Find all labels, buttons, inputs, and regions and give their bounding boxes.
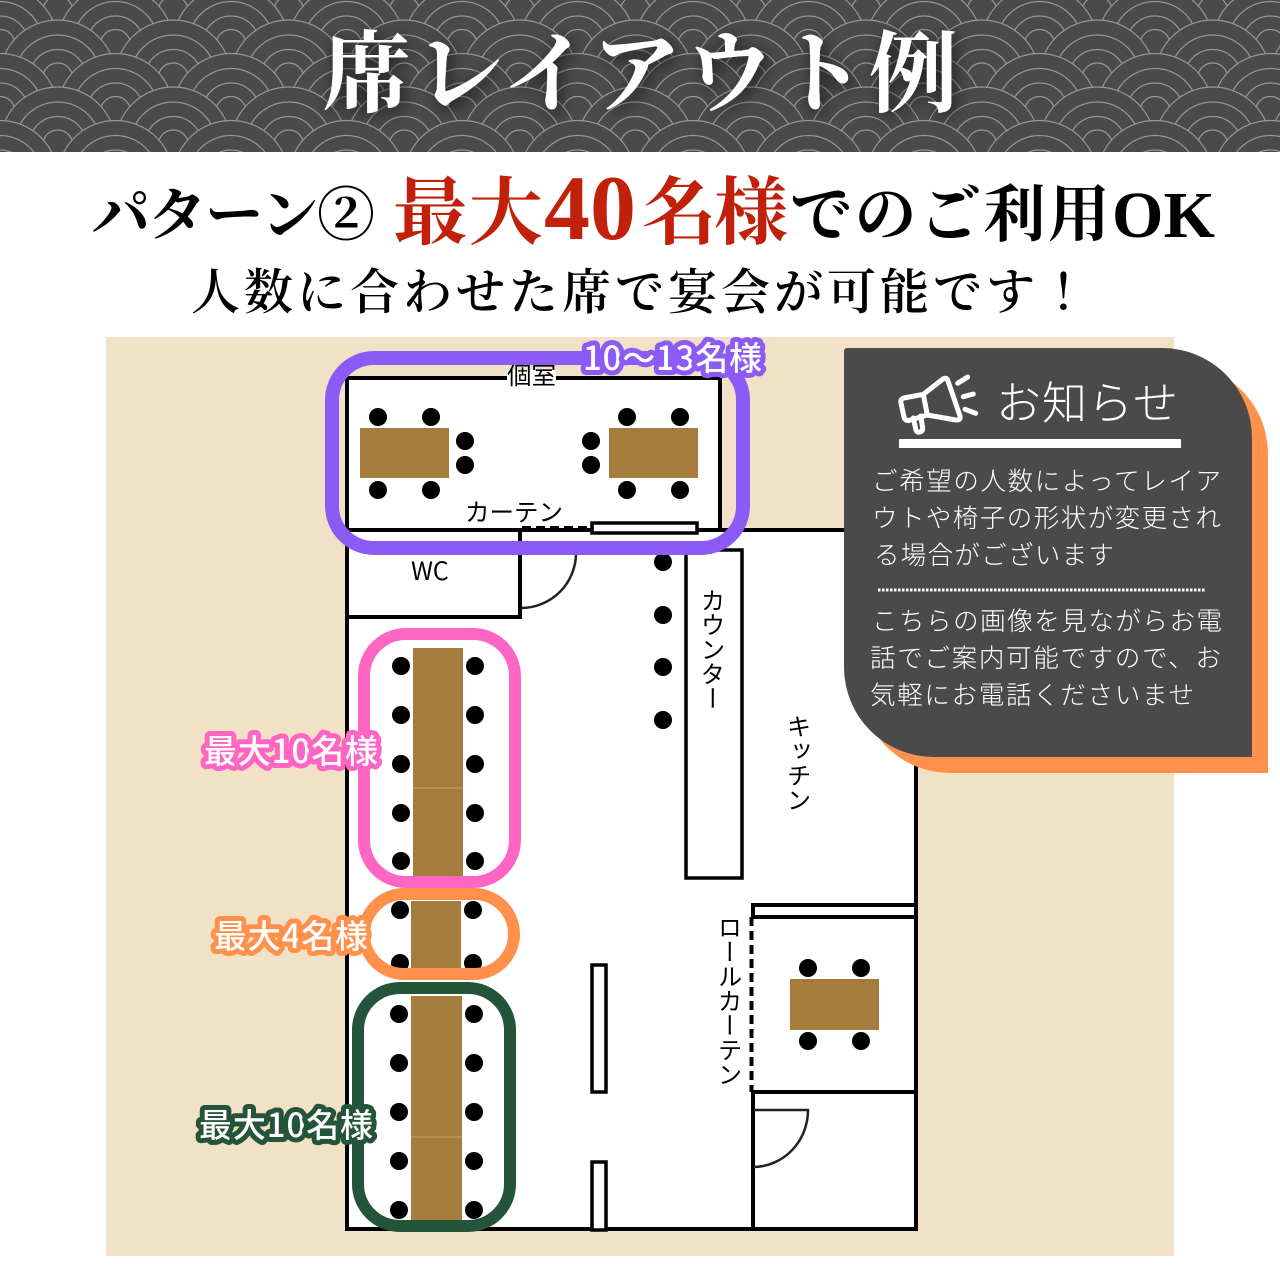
header band with wave pattern: [0, 0, 1280, 152]
notice heading: お知らせ: [996, 367, 1178, 432]
panel: floor plan background: [106, 337, 1174, 1256]
label: up to 10 guests pink: 最大10名様: [204, 725, 378, 773]
notice text 1: [872, 461, 1221, 572]
heading: pattern and capacity: [92, 157, 1215, 259]
heading: pattern and capacity: 最大: [393, 173, 543, 255]
heading underline: [899, 439, 1181, 448]
heading: pattern and capacity: 40: [544, 157, 636, 259]
title: 席レイアウト例: [322, 27, 958, 125]
heading: pattern and capacity: OK: [1112, 179, 1215, 252]
label: 10 to 13 guests: 10～13名様: [583, 332, 762, 380]
notice text 1: ご希望の人数によってレイア: [872, 461, 1221, 498]
plan labels: カーテン: [465, 494, 563, 529]
notice text 2: 話でご案内可能ですので、お: [870, 638, 1221, 675]
plan labels: 個室: [507, 357, 556, 392]
heading: pattern and capacity: 名様: [642, 173, 788, 255]
notice text 2: 気軽にお電話くださいませ: [870, 675, 1194, 712]
area outline: green group: [358, 988, 510, 1226]
notice shadow: [860, 364, 1268, 773]
area outline: private room: [332, 358, 743, 548]
plan labels: ロールカーテン: [712, 915, 748, 1086]
notice card: [844, 348, 1252, 757]
panel: notice: [844, 348, 1268, 773]
label: up to 4 guests: 最大4名様: [214, 910, 368, 958]
chairs: [369, 408, 870, 1219]
tables: [360, 428, 879, 1220]
icon: megaphone: [901, 377, 976, 432]
floor plan: [347, 357, 916, 1230]
walls and rooms: [347, 378, 916, 1230]
heading: pattern and capacity: パターン②: [92, 183, 375, 248]
subheading: 人数に合わせた席で宴会が可能です！: [191, 265, 1088, 320]
plan labels: カウンター: [696, 588, 730, 710]
area outline: orange group: [364, 894, 514, 974]
label: up to 10 guests green: 最大10名様: [199, 1099, 373, 1147]
notice text 1: ウトや椅子の形状が変更され: [872, 498, 1221, 535]
area outline: pink group: [364, 634, 515, 882]
notice text 1: る場合がございます: [874, 535, 1114, 572]
notice text 2: [870, 601, 1222, 712]
plan labels: キッチン: [782, 714, 816, 812]
plan labels: WC: [411, 552, 449, 588]
heading: pattern and capacity: でのご利用: [790, 182, 1110, 250]
plan labels: [411, 357, 816, 1086]
notice text 2: こちらの画像を見ながらお電: [872, 601, 1222, 638]
